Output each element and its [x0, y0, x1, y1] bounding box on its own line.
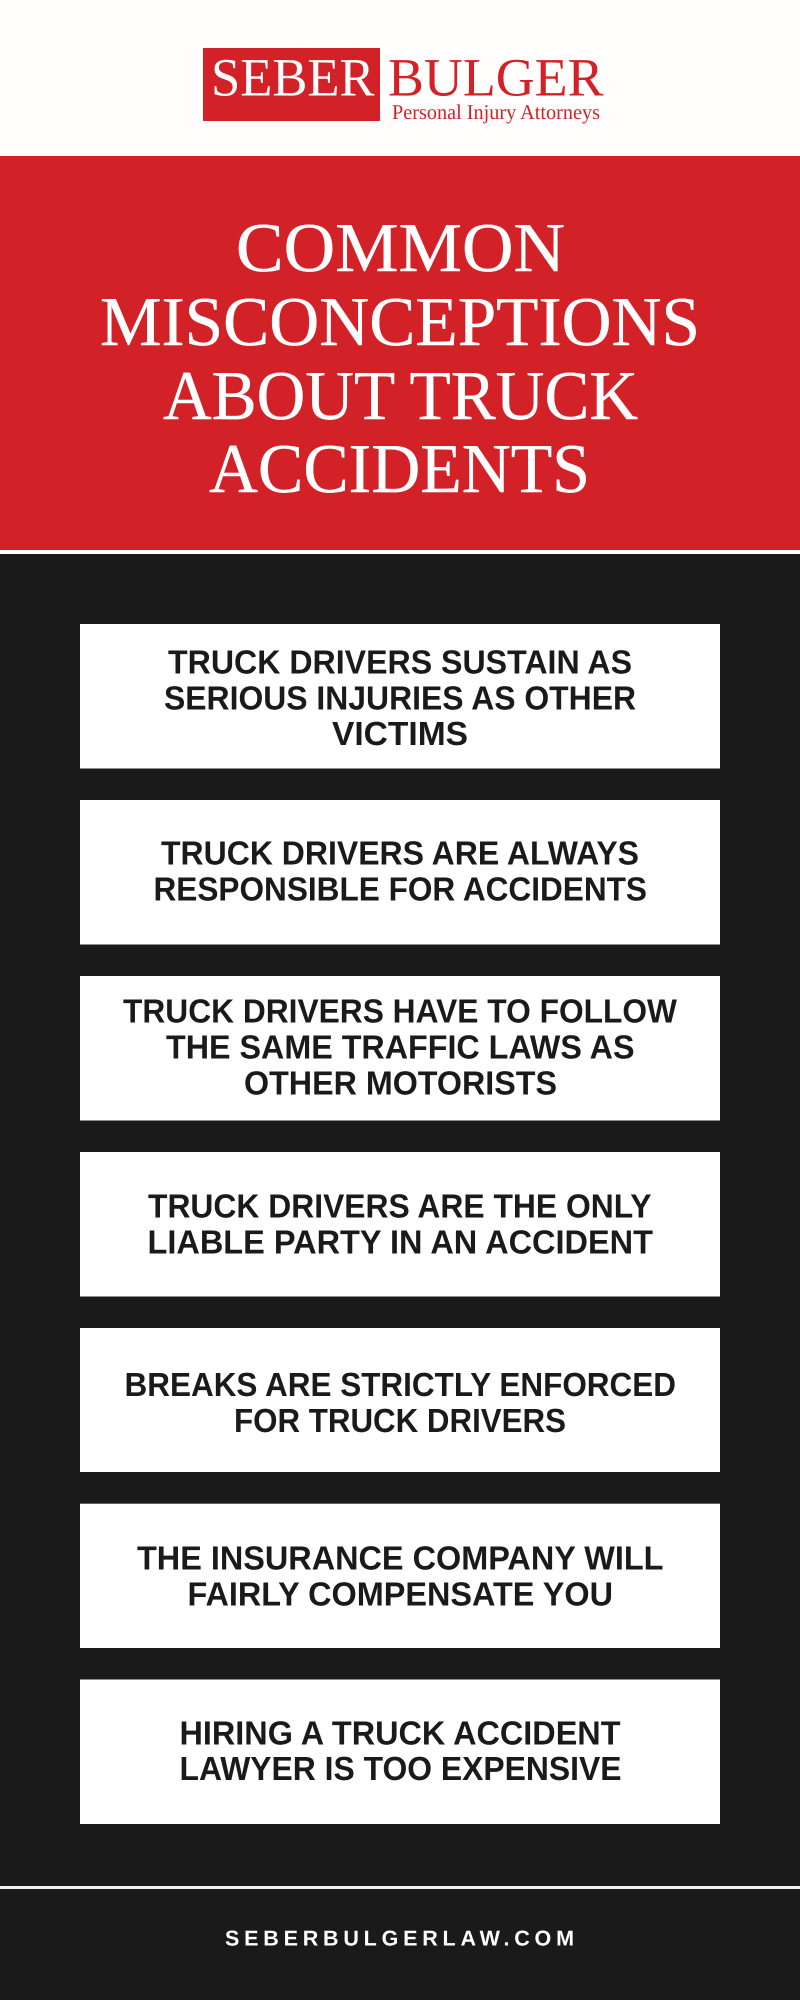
text: misconception 5: FOR TRUCK DRIVERS	[234, 1403, 566, 1440]
text: misconception 3	[123, 994, 677, 1103]
text: misconception 3: OTHER MOTORISTS	[244, 1066, 557, 1103]
panel: misconception 1	[80, 624, 720, 768]
panel: misconception 5	[80, 1328, 720, 1472]
panel: misconception 6	[80, 1504, 720, 1648]
text: misconception 7	[180, 1715, 622, 1788]
logo: Seber Bulger	[203, 47, 604, 124]
panel: misconception 2	[80, 800, 720, 944]
panel: misconception 3	[80, 976, 720, 1120]
text: misconception 4: TRUCK DRIVERS ARE THE ONLY	[148, 1189, 652, 1226]
text: misconception 1: SERIOUS INJURIES AS OTHER	[164, 680, 636, 717]
text: misconception 6: THE INSURANCE COMPANY WILL	[137, 1541, 664, 1578]
text: misconception 1: VICTIMS	[332, 716, 468, 753]
text: misconception 2	[154, 835, 647, 908]
title: MISCONCEPTIONS	[100, 284, 700, 361]
footer: website: SEBERBULGERLAW.COM	[225, 1927, 574, 1951]
title: ACCIDENTS	[209, 431, 590, 508]
text: misconception 6	[137, 1541, 664, 1614]
logo: Seber Bulger: SEBER	[211, 47, 374, 107]
logo: Seber Bulger: BULGER	[388, 47, 604, 107]
panel: misconception 4	[80, 1152, 720, 1296]
text: misconception 7: LAWYER IS TOO EXPENSIVE	[180, 1751, 622, 1788]
panel: red title banner	[0, 156, 800, 550]
text: misconception 4: LIABLE PARTY IN AN ACCIDENT	[148, 1225, 654, 1262]
text: misconception 2: TRUCK DRIVERS ARE ALWAYS	[161, 835, 639, 872]
text: misconception 3: TRUCK DRIVERS HAVE TO FOLLOW	[123, 994, 677, 1031]
text: misconception 6: FAIRLY COMPENSATE YOU	[188, 1577, 613, 1614]
text: misconception 3: THE SAME TRAFFIC LAWS AS	[166, 1030, 634, 1067]
panel: misconception 7	[80, 1680, 720, 1824]
logo: Seber Bulger: Personal Injury Attorneys	[392, 100, 600, 124]
title	[100, 210, 700, 508]
title: COMMON	[236, 210, 565, 287]
header: logo band	[0, 0, 800, 156]
text: misconception 5: BREAKS ARE STRICTLY ENFORCED	[124, 1367, 676, 1404]
text: misconception 5	[124, 1367, 676, 1440]
text: misconception 2: RESPONSIBLE FOR ACCIDENTS	[154, 871, 647, 908]
title: ABOUT TRUCK	[163, 358, 638, 435]
text: misconception 7: HIRING A TRUCK ACCIDENT	[180, 1715, 621, 1752]
text: misconception 1	[164, 644, 636, 753]
text: misconception 4	[148, 1189, 654, 1262]
text: misconception 1: TRUCK DRIVERS SUSTAIN AS	[168, 644, 632, 681]
